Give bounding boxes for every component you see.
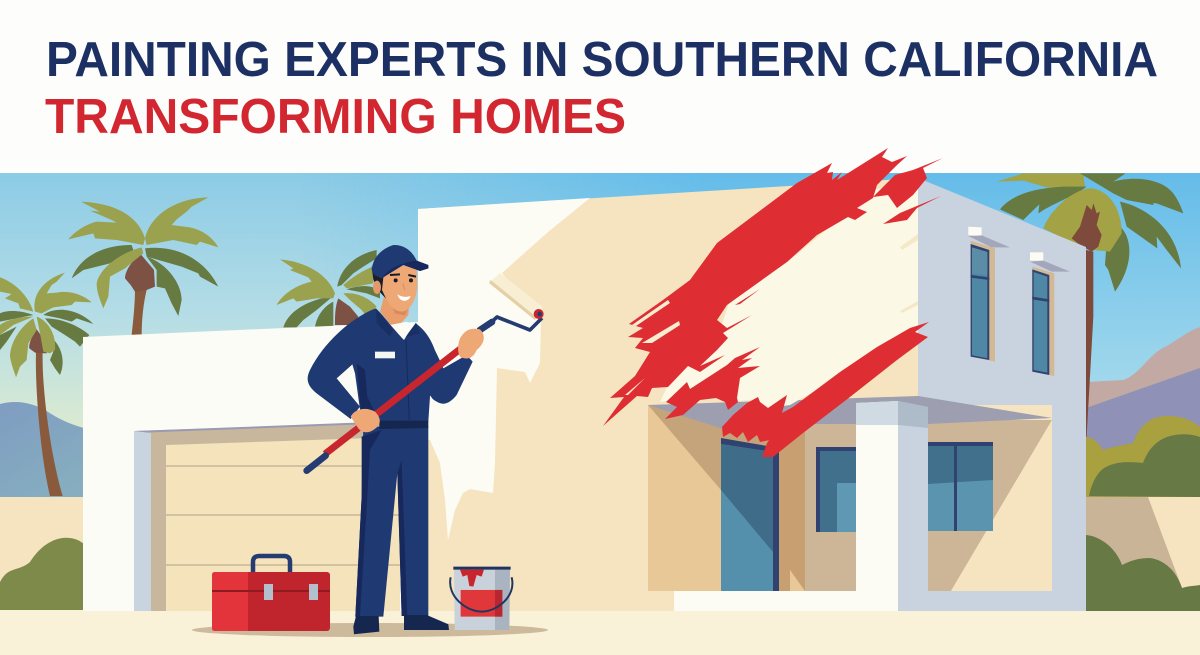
ground shadow bbox=[192, 623, 548, 637]
head bbox=[382, 262, 417, 311]
main cream wall bbox=[418, 178, 918, 611]
garage door bbox=[134, 421, 400, 611]
ear bbox=[373, 281, 381, 294]
title bbox=[45, 33, 1158, 144]
belt bbox=[379, 421, 428, 429]
garage block bbox=[83, 322, 418, 611]
hand right bbox=[458, 329, 484, 359]
painter bbox=[307, 245, 544, 634]
torso bbox=[343, 308, 443, 422]
white painted wall area bbox=[418, 198, 590, 540]
overhang roof bbox=[648, 396, 1052, 428]
paint can bbox=[450, 567, 512, 630]
lower window left bbox=[816, 447, 856, 532]
right mountains bbox=[1086, 327, 1200, 497]
heading line 1: PAINTING EXPERTS IN SOUTHERN CALIFORNIA bbox=[46, 33, 1158, 87]
heading line 2: TRANSFORMING HOMES bbox=[45, 90, 626, 144]
blue side wall bbox=[918, 178, 1086, 611]
toolbox bbox=[212, 556, 330, 631]
collar bbox=[376, 308, 420, 337]
handle bbox=[253, 556, 290, 572]
left bush bbox=[0, 538, 84, 610]
entry door bbox=[721, 438, 779, 591]
roller bbox=[489, 273, 543, 320]
arm left bbox=[308, 308, 376, 419]
arm right bbox=[427, 335, 473, 404]
paint roller pole bbox=[307, 273, 544, 471]
palm tree behind painter bbox=[277, 250, 380, 327]
upper windows bbox=[968, 227, 1070, 376]
palm tree right bbox=[997, 173, 1183, 448]
left mountains bbox=[0, 402, 84, 497]
cap bbox=[372, 245, 428, 278]
hair bbox=[372, 267, 390, 298]
undershirt bbox=[390, 322, 407, 339]
red paint brush stroke bbox=[603, 148, 943, 457]
base step bbox=[674, 591, 1086, 611]
lower window right bbox=[928, 442, 993, 531]
palm tree left bbox=[0, 273, 93, 496]
background bbox=[0, 173, 1200, 655]
right shoe bbox=[404, 615, 449, 630]
column bbox=[856, 401, 928, 591]
main upper band bbox=[603, 148, 907, 426]
trousers bbox=[355, 427, 428, 617]
top right spikes bbox=[873, 158, 943, 208]
lower left blob bbox=[665, 347, 760, 419]
hand left bbox=[351, 409, 380, 432]
palm tree middle bbox=[68, 197, 218, 335]
freshly painted patch bbox=[660, 180, 918, 408]
paint streak gaps bbox=[625, 300, 680, 395]
right bushes bbox=[1086, 416, 1200, 611]
left shoe bbox=[353, 616, 379, 634]
name tag bbox=[375, 352, 395, 358]
entry recess bbox=[648, 405, 1052, 591]
lower band bbox=[722, 322, 929, 457]
neck bbox=[380, 297, 410, 330]
roller arm bbox=[488, 317, 542, 330]
face details bbox=[390, 274, 416, 301]
